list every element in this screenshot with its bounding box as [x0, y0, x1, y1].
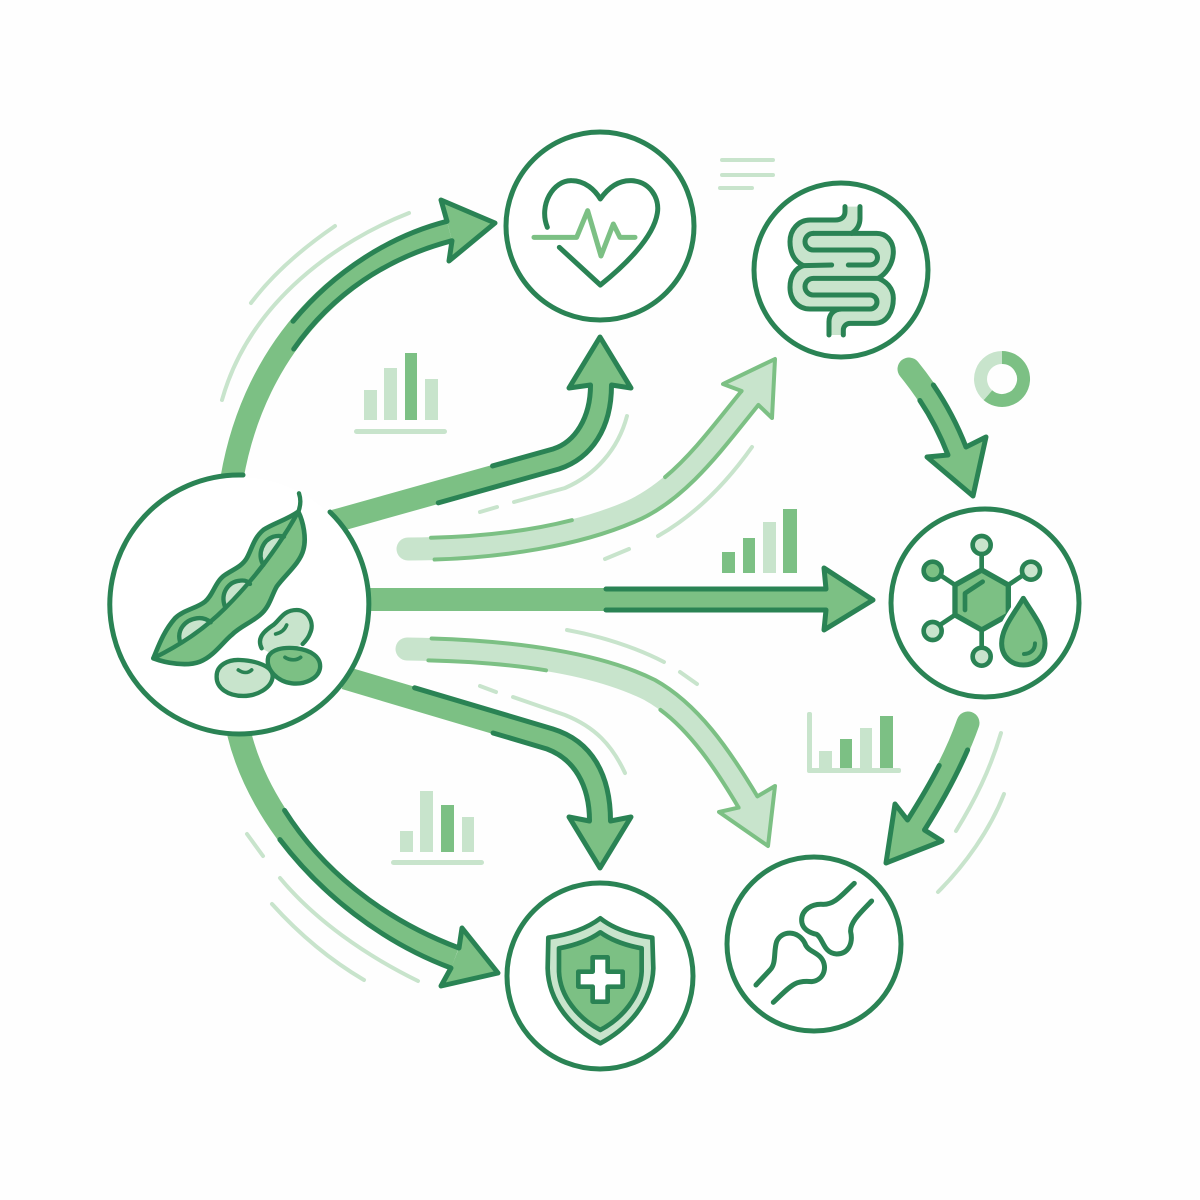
arrow: source to shield, lower arc	[228, 730, 498, 986]
panel: soybean source	[110, 475, 369, 735]
arrow: source to heart, upper arc	[222, 200, 495, 480]
bar chart: lower left	[391, 791, 484, 865]
bar chart: right with axes	[807, 712, 901, 773]
icon: soybean pod	[153, 493, 305, 664]
icon: intestine	[790, 207, 893, 335]
motion lines	[222, 160, 1004, 981]
arrow: molecule to joint	[886, 720, 977, 863]
panel: heart health	[506, 132, 694, 320]
icon: shield with cross	[548, 918, 653, 1043]
arrow: source to joint, light	[407, 638, 775, 846]
icon: heart with pulse	[534, 181, 658, 285]
arrow: source to shield, direct	[342, 668, 631, 868]
arrow: source to heart, direct	[332, 337, 631, 531]
panel: gut health	[754, 183, 928, 357]
panel: molecule	[891, 509, 1079, 697]
donut chart	[981, 357, 1024, 400]
icon: knee joint	[756, 883, 872, 1002]
bar chart: center	[722, 509, 797, 573]
panel: joint health	[727, 857, 901, 1031]
icon: molecule and droplet	[924, 536, 1045, 666]
panel: immune shield	[507, 883, 693, 1069]
arrow: gut to molecule	[901, 363, 986, 496]
bar chart: upper left	[354, 353, 447, 434]
arrow: source to gut, light	[408, 359, 775, 560]
icon: soybeans	[217, 610, 320, 696]
arrow: source to molecule	[365, 568, 873, 630]
